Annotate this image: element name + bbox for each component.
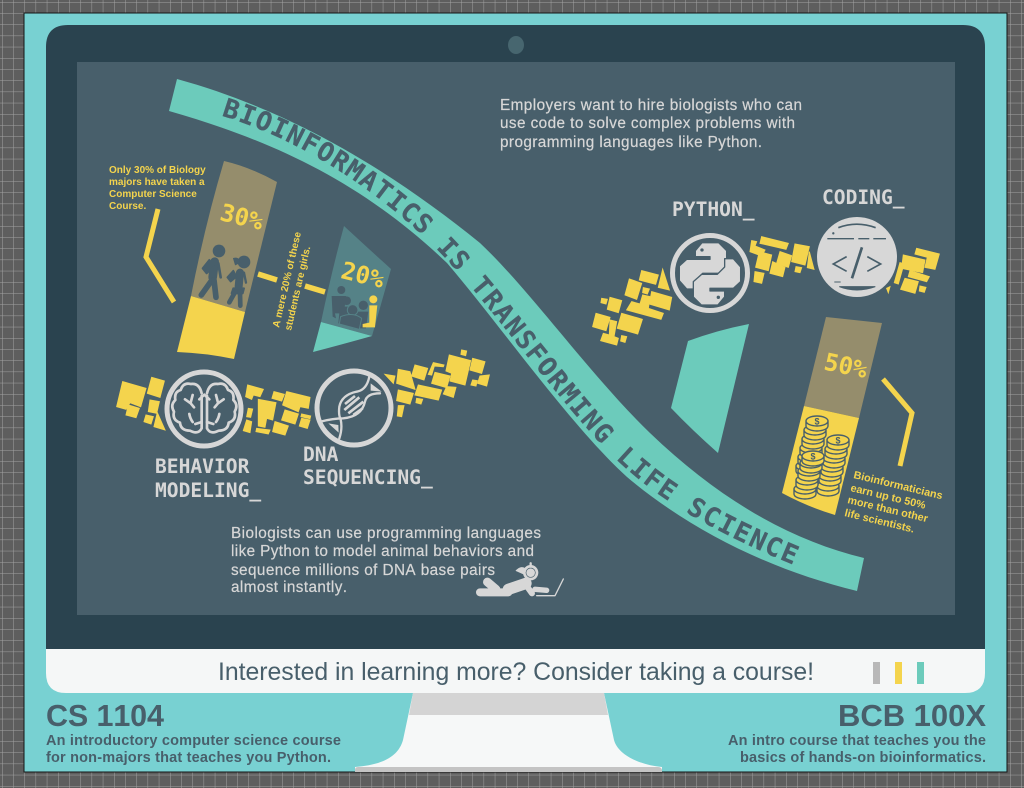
callout line left xyxy=(146,209,174,302)
icon: DNA helix xyxy=(317,371,391,445)
indicator bars xyxy=(873,662,924,684)
monitor stand xyxy=(355,693,662,772)
callout: bioinformatician salary xyxy=(843,469,944,536)
icon: person lying with laptop xyxy=(480,563,563,596)
icon: brain xyxy=(167,372,241,446)
webcam xyxy=(508,36,524,54)
biologists paragraph xyxy=(231,525,541,596)
course: CS 1104: An introductory computer science course xyxy=(46,733,341,749)
label: DNA sequencing: DNA xyxy=(303,443,339,466)
icon: students walking xyxy=(201,245,250,306)
title: BIOINFORMATICS IS TRANSFORMING LIFE SCIENCE xyxy=(222,98,800,564)
course: CS 1104 xyxy=(46,699,341,766)
label: coding: CODING_ xyxy=(822,186,905,209)
bottom white bar xyxy=(46,649,985,693)
bar: 50 percent xyxy=(782,317,882,515)
intro text xyxy=(500,97,802,151)
biologists paragraph: almost instantly. xyxy=(231,579,347,596)
callout: 30 percent of biology majors: majors have taken a xyxy=(109,177,205,188)
course: BCB 100X xyxy=(728,698,986,766)
callout: 30 percent of biology majors xyxy=(109,165,206,212)
label: python: PYTHON_ xyxy=(672,198,755,221)
screen xyxy=(77,62,955,615)
bar: 30 percent xyxy=(177,161,277,359)
bar: 20 percent xyxy=(313,226,391,352)
label: behavior modeling xyxy=(155,455,261,502)
course: BCB 100X: basics of hands-on bioinformatics. xyxy=(740,750,986,766)
value 20%: 20% xyxy=(338,256,388,294)
biologists paragraph: Biologists can use programming languages xyxy=(231,525,541,542)
bottom prompt: Interested in learning more? Consider taking a course! xyxy=(218,659,814,686)
icon: coin stacks: $ xyxy=(835,436,841,446)
icon: coin stacks: $ xyxy=(810,452,816,462)
label: behavior modeling: MODELING_ xyxy=(155,479,261,502)
callout: 30 percent of biology majors: Course. xyxy=(109,201,146,212)
label: behavior modeling: BEHAVIOR xyxy=(155,455,250,478)
icon: python logo xyxy=(672,236,748,310)
rotated note: girls: A mere 20% of these xyxy=(271,230,304,329)
label: DNA sequencing: SEQUENCING_ xyxy=(303,466,433,489)
icon: coin stacks xyxy=(794,416,849,499)
monitor bezel xyxy=(46,25,985,649)
callout: 30 percent of biology majors: Only 30% of Biology xyxy=(109,165,206,176)
callout line right xyxy=(883,379,912,466)
course: CS 1104: CS 1104 xyxy=(46,699,164,733)
empty teal bar shape xyxy=(671,324,749,453)
biologists paragraph: sequence millions of DNA base pairs xyxy=(231,562,495,579)
connector dashes xyxy=(258,274,325,292)
callout: bioinformatician salary: more than other xyxy=(846,494,930,525)
label: DNA sequencing xyxy=(303,443,433,489)
course: BCB 100X: An intro course that teaches you the xyxy=(728,733,986,749)
intro text: use code to solve complex problems with xyxy=(500,115,795,132)
icon: coin stacks: $ xyxy=(814,416,820,426)
icon: group with one highlighted xyxy=(332,286,377,329)
icon: code window xyxy=(817,217,897,297)
data blocks: python and coding strand xyxy=(593,237,939,345)
callout: bioinformatician salary: life scientists. xyxy=(843,507,916,536)
data blocks: behavior and DNA strand xyxy=(117,350,489,435)
callout: bioinformatician salary: earn up to 50% xyxy=(849,482,927,512)
course: BCB 100X: BCB 100X xyxy=(838,698,986,733)
callout: bioinformatician salary: Bioinformaticians xyxy=(852,469,944,502)
intro text: programming languages like Python. xyxy=(500,134,762,151)
value 50%: 50% xyxy=(822,348,870,384)
callout: 30 percent of biology majors: Computer Science xyxy=(109,189,197,200)
biologists paragraph: like Python to model animal behaviors and xyxy=(231,543,534,560)
rotated note: girls: students are girls. xyxy=(283,245,313,332)
value 30%: 30% xyxy=(217,198,267,236)
intro text: Employers want to hire biologists who can xyxy=(500,97,802,114)
course: CS 1104: for non-majors that teaches you Python. xyxy=(46,750,331,766)
